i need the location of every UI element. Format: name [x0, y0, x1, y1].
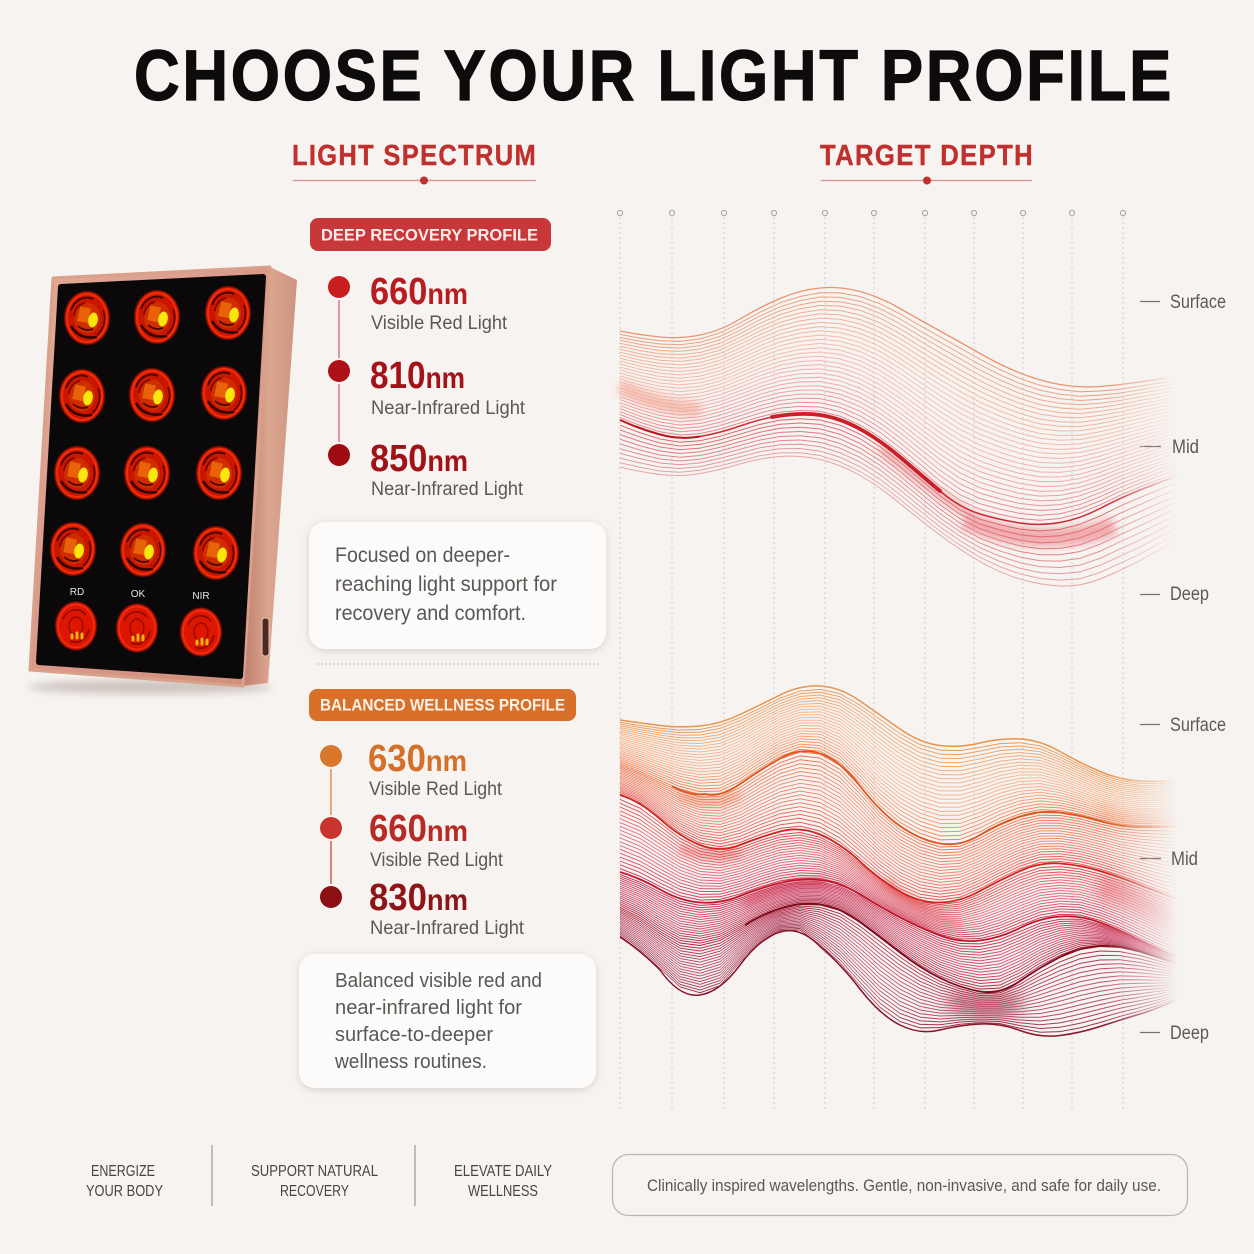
wavelength list: balanced wellness: 630nm — [368, 738, 467, 780]
wavelength list: deep recovery: 810nm — [370, 355, 465, 397]
wavelength list: balanced wellness: 830nm — [369, 877, 468, 919]
footer benefit: energize your body: YOUR BODY — [86, 1183, 163, 1200]
heading: light spectrum — [292, 140, 537, 184]
wavelength list: balanced wellness: Near-Infrared Light — [370, 918, 525, 939]
card: balanced wellness description — [299, 954, 596, 1088]
card: deep recovery description: reaching light support for — [335, 573, 557, 596]
depth scale: balanced wellness: Deep — [1170, 1023, 1209, 1044]
footer benefit: support natural recovery — [251, 1163, 378, 1200]
wavelength list: deep recovery: 850nm — [370, 438, 468, 480]
depth grid — [617, 210, 1126, 1110]
wavelength list: balanced wellness: Visible Red Light — [370, 850, 504, 871]
chart: balanced wellness depth waves — [620, 685, 1176, 1037]
wavelength list: deep recovery: Near-Infrared Light — [371, 398, 526, 419]
device: red light panel — [28, 267, 297, 694]
footer benefit: support natural recovery: RECOVERY — [280, 1183, 349, 1200]
footer benefit: elevate daily wellness: ELEVATE DAILY — [454, 1163, 552, 1180]
wavelength list: deep recovery: Near-Infrared Light — [371, 479, 524, 500]
footer benefit: support natural recovery: SUPPORT NATURAL — [251, 1163, 378, 1180]
depth scale: balanced wellness — [1140, 715, 1226, 1044]
badge: deep recovery profile — [310, 218, 551, 251]
depth scale: balanced wellness: Surface — [1170, 715, 1226, 736]
card: deep recovery description: recovery and comfort. — [335, 602, 526, 625]
card: deep recovery description: Focused on deeper- — [335, 544, 510, 567]
wavelength list: deep recovery — [328, 271, 526, 500]
footer note — [612, 1154, 1188, 1216]
depth scale: deep recovery — [1140, 292, 1226, 605]
card: balanced wellness description: wellness routines. — [334, 1051, 487, 1073]
depth scale: deep recovery: Deep — [1170, 584, 1209, 605]
wavelength list: balanced wellness: Visible Red Light — [369, 779, 503, 800]
card: deep recovery description — [309, 522, 606, 649]
device: red light panel: RD — [70, 587, 84, 598]
heading: target depth: TARGET DEPTH — [820, 140, 1034, 172]
footer note: Clinically inspired wavelengths. Gentle, non-invasive, and safe for daily use. — [647, 1176, 1161, 1195]
depth scale: deep recovery: Mid — [1172, 437, 1199, 458]
wavelength list: balanced wellness: 660nm — [369, 808, 468, 850]
footer benefit: energize your body: ENERGIZE — [91, 1163, 155, 1180]
footer benefit: elevate daily wellness — [454, 1163, 552, 1200]
chart: deep recovery depth waves — [614, 286, 1176, 587]
badge: balanced wellness profile — [309, 689, 576, 721]
depth scale: balanced wellness: Mid — [1171, 849, 1198, 870]
device: red light panel: OK — [131, 589, 146, 600]
card: balanced wellness description: near-infrared light for — [335, 997, 522, 1019]
heading: target depth — [820, 140, 1034, 184]
wavelength list: balanced wellness — [320, 738, 525, 939]
heading: light spectrum: LIGHT SPECTRUM — [292, 140, 537, 172]
badge: balanced wellness profile: BALANCED WELLNESS PROFILE — [320, 696, 565, 714]
depth scale: deep recovery: Surface — [1170, 292, 1226, 313]
wavelength list: deep recovery: Visible Red Light — [371, 313, 508, 334]
footer benefit: elevate daily wellness: WELLNESS — [468, 1183, 538, 1200]
badge: deep recovery profile: DEEP RECOVERY PROFILE — [321, 226, 538, 244]
device: red light panel: NIR — [192, 591, 210, 602]
card: balanced wellness description: surface-to-deeper — [335, 1024, 493, 1046]
card: balanced wellness description: Balanced visible red and — [335, 970, 542, 992]
footer benefit: energize your body — [86, 1163, 163, 1200]
wavelength list: deep recovery: 660nm — [370, 271, 468, 313]
